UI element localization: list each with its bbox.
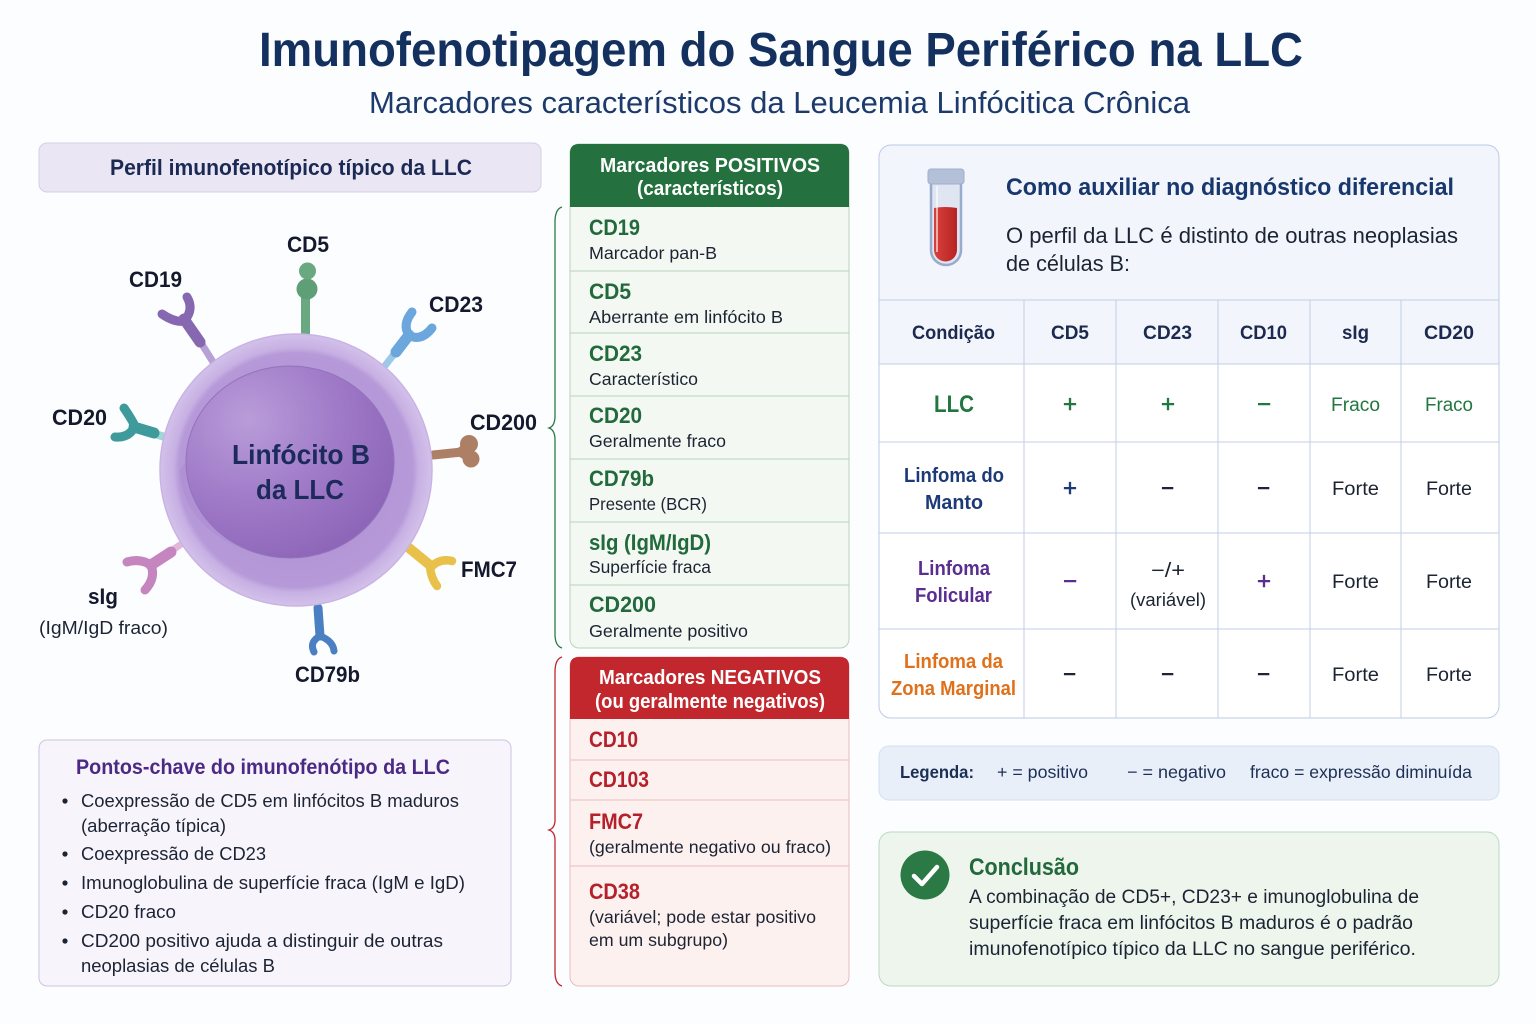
row: Linfoma da Zona Marginal: Zona Marginal xyxy=(891,678,1016,700)
positive marker rows: Geralmente positivo xyxy=(589,621,748,641)
negative marker rows: CD38 xyxy=(589,879,640,904)
negative marker rows xyxy=(589,727,831,950)
key points list: CD200 positivo ajuda a distinguir de outras xyxy=(81,930,443,951)
receptor: CD23 xyxy=(384,312,432,367)
row: Linfoma da Zona Marginal: − xyxy=(1257,661,1270,688)
conclusion text: A combinação de CD5+, CD23+ e imunoglobulina de xyxy=(969,887,1419,908)
row: Linfoma do Manto: Manto xyxy=(925,492,983,514)
row: Linfoma do Manto xyxy=(904,465,1472,514)
row: LLC: LLC xyxy=(934,391,974,418)
negative header xyxy=(570,657,849,719)
conclusion heading: Conclusão xyxy=(969,854,1079,881)
table header row: Condição xyxy=(912,322,995,344)
positive marker rows: CD79b xyxy=(589,466,654,491)
positive marker rows: Aberrante em linfócito B xyxy=(589,307,783,327)
positive marker rows: CD23 xyxy=(589,341,642,366)
row: Linfoma do Manto: Forte xyxy=(1332,479,1379,500)
row: LLC: + xyxy=(1161,391,1175,418)
row: Linfoma do Manto: Forte xyxy=(1426,479,1472,500)
row: Linfoma Folicular: Forte xyxy=(1332,572,1379,593)
row: LLC: + xyxy=(1063,391,1077,418)
key points list: Coexpressão de CD5 em linfócitos B maduros xyxy=(81,790,459,811)
row: Linfoma da Zona Marginal: Linfoma da xyxy=(904,651,1004,673)
row: Linfoma da Zona Marginal xyxy=(891,651,1472,700)
positive marker rows: CD20 xyxy=(589,403,642,428)
negative marker rows: (variável; pode estar positivo xyxy=(589,907,816,927)
marker labels: CD20 xyxy=(52,405,107,430)
panel: differential diagnosis xyxy=(879,145,1499,718)
panel: typical profile heading: Perfil imunofenotípico típico da LLC xyxy=(110,155,472,180)
marker labels: FMC7 xyxy=(461,557,517,582)
legend xyxy=(879,746,1499,800)
receptor: CD19 xyxy=(162,297,213,362)
legend: fraco = expressão diminuída xyxy=(1250,762,1472,782)
row: Linfoma Folicular: + xyxy=(1257,568,1271,595)
comparison table xyxy=(879,300,1499,718)
positive marker rows: Presente (BCR) xyxy=(589,494,707,514)
positive marker rows: Característico xyxy=(589,369,698,389)
panel: typical profile heading xyxy=(39,143,541,192)
cell label: da LLC xyxy=(256,474,344,505)
legend: − = negativo xyxy=(1127,762,1226,782)
icon: blood test tube xyxy=(928,169,964,265)
icon: check mark xyxy=(900,850,950,900)
title: Imunofenotipagem do Sangue Periférico na LLC xyxy=(259,24,1303,77)
table header row: CD23 xyxy=(1143,322,1192,344)
key points heading: Pontos-chave do imunofenótipo da LLC xyxy=(76,756,450,779)
positive marker rows: Geralmente fraco xyxy=(589,431,726,451)
brace: positive markers xyxy=(549,207,562,648)
key points list: Coexpressão de CD23 xyxy=(81,843,266,864)
differential intro xyxy=(1006,223,1458,276)
receptor: FMC7 xyxy=(409,548,452,586)
row: LLC: Fraco xyxy=(1425,395,1473,416)
conclusion text: imunofenotípico típico da LLC no sangue periférico. xyxy=(969,939,1416,960)
row: LLC: Fraco xyxy=(1331,395,1380,416)
row: Linfoma da Zona Marginal: Forte xyxy=(1426,665,1472,686)
conclusion text: superfície fraca em linfócitos B maduros é o padrão xyxy=(969,913,1413,934)
row: Linfoma do Manto: − xyxy=(1161,475,1174,502)
key points list: Imunoglobulina de superfície fraca (IgM e IgD) xyxy=(81,872,465,893)
row: LLC: − xyxy=(1257,391,1271,418)
marker labels: CD200 xyxy=(470,410,537,435)
row: Linfoma Folicular: Linfoma xyxy=(918,558,991,580)
positive marker rows: CD5 xyxy=(589,279,631,304)
legend: + = positivo xyxy=(997,762,1088,782)
receptor: sIg xyxy=(127,543,183,590)
receptor: CD79b xyxy=(312,608,334,652)
panel: positive markers xyxy=(570,144,849,648)
diagram: B lymphocyte with surface markers xyxy=(39,232,537,687)
positive marker rows: Marcador pan-B xyxy=(589,243,717,263)
positive marker rows: CD19 xyxy=(589,215,640,240)
row: Linfoma do Manto: Linfoma do xyxy=(904,465,1004,487)
marker labels: CD79b xyxy=(295,662,360,687)
row: Linfoma Folicular: (variável) xyxy=(1130,590,1206,610)
marker labels: CD23 xyxy=(429,292,483,317)
key points list: (aberração típica) xyxy=(81,815,226,836)
nucleus xyxy=(186,366,394,558)
row: Linfoma do Manto: + xyxy=(1063,475,1077,502)
row: LLC xyxy=(934,391,1473,418)
receptor: CD5 xyxy=(296,262,318,338)
table header row: CD20 xyxy=(1424,322,1474,344)
row: Linfoma Folicular: Folicular xyxy=(915,585,992,607)
marker labels: sIg xyxy=(88,584,118,609)
marker labels: CD19 xyxy=(129,267,182,292)
positive marker rows: CD200 xyxy=(589,592,656,617)
brace: negative markers xyxy=(549,657,562,986)
panel: negative markers xyxy=(570,657,849,986)
negative marker rows: (geralmente negativo ou fraco) xyxy=(589,837,831,857)
row: Linfoma Folicular: − xyxy=(1063,568,1077,595)
table header row xyxy=(912,322,1474,344)
panel: conclusion xyxy=(879,832,1499,986)
row: Linfoma Folicular: Forte xyxy=(1426,572,1472,593)
negative marker rows: em um subgrupo) xyxy=(589,930,728,950)
differential intro: O perfil da LLC é distinto de outras neoplasias xyxy=(1006,223,1458,248)
positive header xyxy=(570,144,849,207)
table header row: CD10 xyxy=(1240,322,1287,344)
row: Linfoma do Manto: − xyxy=(1257,475,1270,502)
negative marker rows: CD10 xyxy=(589,727,638,752)
row: Linfoma da Zona Marginal: Forte xyxy=(1332,665,1379,686)
sIg note: (IgM/IgD fraco) xyxy=(39,618,168,638)
differential intro: de células B: xyxy=(1006,251,1130,276)
table header row: sIg xyxy=(1342,322,1369,344)
negative marker rows: CD103 xyxy=(589,767,649,792)
key points list: neoplasias de células B xyxy=(81,955,275,976)
marker labels: CD5 xyxy=(287,232,329,257)
negative header: (ou geralmente negativos) xyxy=(595,690,825,713)
negative marker rows: FMC7 xyxy=(589,809,643,834)
row: Linfoma Folicular: −/+ xyxy=(1151,560,1185,582)
cell body xyxy=(160,334,432,606)
negative header: Marcadores NEGATIVOS xyxy=(599,666,821,689)
positive header: Marcadores POSITIVOS xyxy=(600,154,820,177)
key points list xyxy=(62,790,465,976)
marker labels xyxy=(52,232,537,687)
positive marker rows xyxy=(589,215,783,641)
row: Linfoma da Zona Marginal: − xyxy=(1161,661,1174,688)
cell label: Linfócito B xyxy=(232,439,370,470)
cell label xyxy=(232,439,370,505)
legend: Legenda: xyxy=(900,762,974,782)
subtitle: Marcadores característicos da Leucemia Linfócitica Crônica xyxy=(369,85,1191,120)
receptor: CD20 xyxy=(115,408,168,438)
table header row: CD5 xyxy=(1051,322,1089,344)
positive header: (característicos) xyxy=(637,177,783,200)
row: Linfoma da Zona Marginal: − xyxy=(1063,661,1076,688)
row: Linfoma Folicular xyxy=(915,558,1472,610)
key points list: CD20 fraco xyxy=(81,901,176,922)
conclusion text xyxy=(969,887,1419,960)
positive marker rows: sIg (IgM/IgD) xyxy=(589,530,711,555)
receptor: CD200 xyxy=(433,435,480,468)
panel: key points xyxy=(39,740,511,986)
positive marker rows: Superfície fraca xyxy=(589,557,711,577)
differential heading: Como auxiliar no diagnóstico diferencial xyxy=(1006,174,1454,201)
